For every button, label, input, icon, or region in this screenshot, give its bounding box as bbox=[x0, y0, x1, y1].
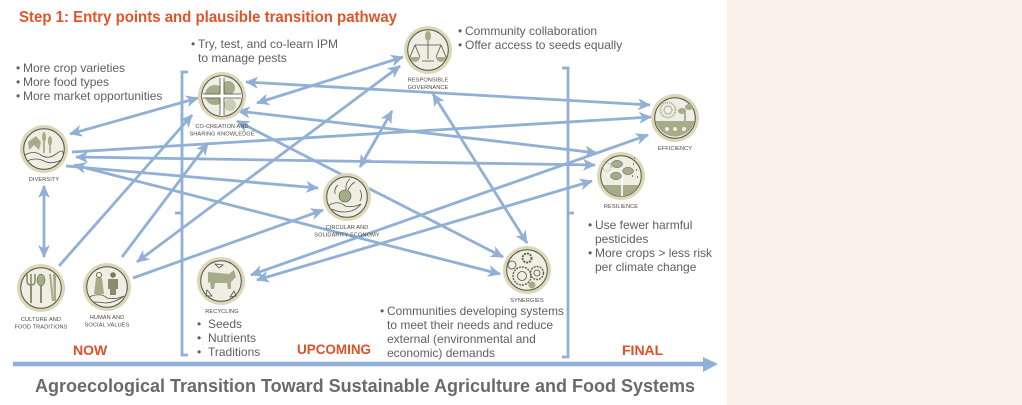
text block: resilience notes: • bbox=[588, 246, 592, 260]
arrow: diversity to efficiency bbox=[72, 117, 651, 152]
arrow: governance and synergies bbox=[433, 94, 527, 243]
text block: synergies notes: external (environmental and bbox=[387, 332, 536, 346]
stage brackets bbox=[175, 68, 574, 357]
title: Step 1: Entry points and plausible transition pathway bbox=[19, 9, 397, 26]
icon: efficiency bbox=[651, 94, 699, 142]
label: recycling: RECYCLING bbox=[205, 309, 239, 315]
label: resilience: RESILIENCE bbox=[604, 204, 638, 210]
icon: diversity bbox=[20, 125, 68, 173]
label: sharing knowledge: SHARING KNOWLEDGE bbox=[189, 132, 255, 138]
label: human and: HUMAN AND bbox=[90, 315, 124, 321]
bottom title: Agroecological Transition Toward Sustainable Agriculture and Food Systems bbox=[35, 376, 695, 396]
text block: diversity notes: More food types bbox=[23, 75, 109, 89]
text block: co-creation notes: to manage pests bbox=[198, 51, 287, 65]
right bracket bbox=[562, 68, 574, 357]
icon: synergies bbox=[503, 246, 551, 294]
right side beige panel bbox=[727, 0, 1022, 405]
text block: resilience notes: Use fewer harmful bbox=[595, 218, 692, 232]
text block: resilience notes: • bbox=[588, 218, 592, 232]
arrow: co-creation and synergies bbox=[237, 121, 503, 257]
stage heading: final: FINAL bbox=[622, 342, 664, 358]
icon: human and social values bbox=[83, 263, 131, 311]
text block: resilience notes: pesticides bbox=[595, 232, 648, 246]
label: efficiency: EFFICIENCY bbox=[658, 146, 692, 152]
text block: governance notes: Community collaboration bbox=[465, 24, 597, 38]
icon: culture and food traditions bbox=[17, 264, 65, 312]
arrow: co-creation and governance bbox=[257, 57, 403, 103]
label: governance: GOVERNANCE bbox=[408, 85, 449, 91]
text block: recycling notes: Nutrients bbox=[208, 331, 256, 345]
text block: synergies notes: to meet their needs and reduce bbox=[387, 318, 553, 332]
label: food traditions: FOOD TRADITIONS bbox=[14, 324, 68, 330]
label: co-creation: CO-CREATION AND bbox=[195, 124, 249, 130]
stage heading: upcoming: UPCOMING bbox=[297, 341, 371, 357]
arrow: culture to co-creation bbox=[59, 115, 192, 266]
text block: recycling notes: Seeds bbox=[208, 317, 242, 331]
label: solidarity economy: SOLIDARITY ECONOMY bbox=[314, 232, 380, 238]
text block: synergies notes: economic) demands bbox=[387, 346, 495, 360]
label: social values: SOCIAL VALUES bbox=[85, 322, 130, 328]
label: diversity: DIVERSITY bbox=[29, 177, 59, 183]
text block: co-creation notes: • bbox=[191, 37, 195, 51]
label: synergies: SYNERGIES bbox=[510, 298, 544, 304]
arrow: recycling and efficiency bbox=[251, 135, 648, 275]
icon: recycling bbox=[197, 257, 245, 305]
label: responsible: RESPONSIBLE bbox=[408, 78, 448, 84]
left bracket bbox=[175, 72, 188, 355]
text block: governance notes: • bbox=[458, 38, 462, 52]
icon: co-creation and sharing knowledge bbox=[198, 72, 246, 120]
text block: recycling notes: • bbox=[197, 345, 201, 359]
text block: diversity notes: • bbox=[16, 61, 20, 75]
arrow: co-creation and efficiency bbox=[246, 82, 650, 105]
arrow: human values to circular economy bbox=[133, 210, 323, 278]
icon: circular and solidarity economy bbox=[323, 173, 371, 221]
arrow: co-creation and resilience bbox=[238, 111, 597, 153]
arrow: circular economy and governance bbox=[360, 111, 392, 167]
text block: governance notes: • bbox=[458, 24, 462, 38]
text block: recycling notes: • bbox=[197, 331, 201, 345]
text block: synergies notes: • bbox=[380, 304, 384, 318]
arrow: diversity to circular economy bbox=[66, 166, 318, 188]
label: culture and: CULTURE AND bbox=[21, 317, 61, 323]
arrow: diversity and culture bbox=[43, 186, 45, 257]
timeline arrow bbox=[13, 357, 718, 372]
icon labels bbox=[14, 78, 692, 330]
arrow: diversity and resilience bbox=[76, 157, 595, 165]
text block: governance notes: Offer access to seeds equally bbox=[465, 38, 622, 52]
text block: resilience notes: per climate change bbox=[595, 260, 697, 274]
arrow: diversity and co-creation bbox=[70, 98, 198, 134]
text block: diversity notes: • bbox=[16, 75, 20, 89]
label: circular and: CIRCULAR AND bbox=[326, 225, 368, 231]
text block: synergies notes: Communities developing systems bbox=[387, 304, 564, 318]
icon: responsible governance bbox=[404, 26, 452, 74]
text block: diversity notes: More market opportunities bbox=[23, 89, 162, 103]
text block: diversity notes: More crop varieties bbox=[23, 61, 125, 75]
arrow: human values to co-creation bbox=[122, 143, 208, 257]
text block: recycling notes: Traditions bbox=[208, 345, 260, 359]
arrow: recycling and resilience bbox=[257, 181, 592, 280]
arrow: diversity and synergies bbox=[74, 165, 500, 274]
stage heading: now: NOW bbox=[73, 342, 108, 358]
arrow: human values and governance bbox=[137, 66, 400, 262]
text block: resilience notes: More crops > less risk bbox=[595, 246, 713, 260]
text block: co-creation notes: Try, test, and co-learn IPM bbox=[198, 37, 338, 51]
network of transition arrows bbox=[44, 57, 651, 280]
text block: recycling notes: • bbox=[197, 317, 201, 331]
icon: resilience bbox=[597, 152, 645, 200]
text block: diversity notes: • bbox=[16, 89, 20, 103]
